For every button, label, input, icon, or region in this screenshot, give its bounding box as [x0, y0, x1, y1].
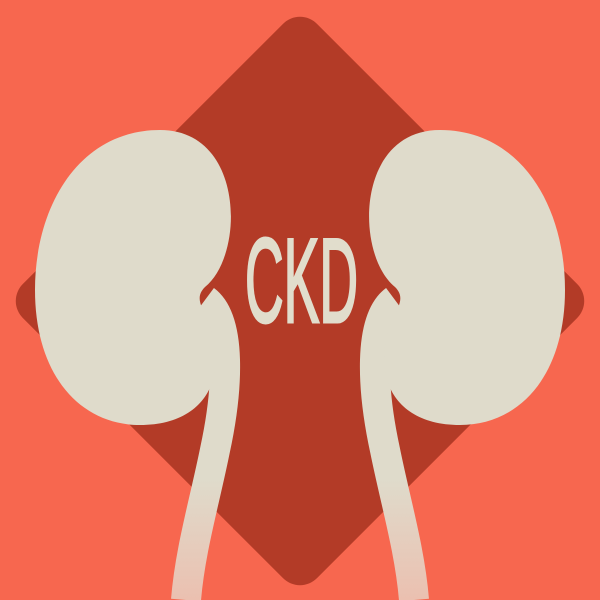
- left kidney body: [35, 130, 231, 425]
- text: CKD: [245, 214, 358, 348]
- right ureter: [375, 300, 414, 600]
- right kidney: [369, 130, 565, 600]
- left ureter: [186, 300, 225, 600]
- left kidney: [35, 130, 231, 600]
- right kidney body: [369, 130, 565, 425]
